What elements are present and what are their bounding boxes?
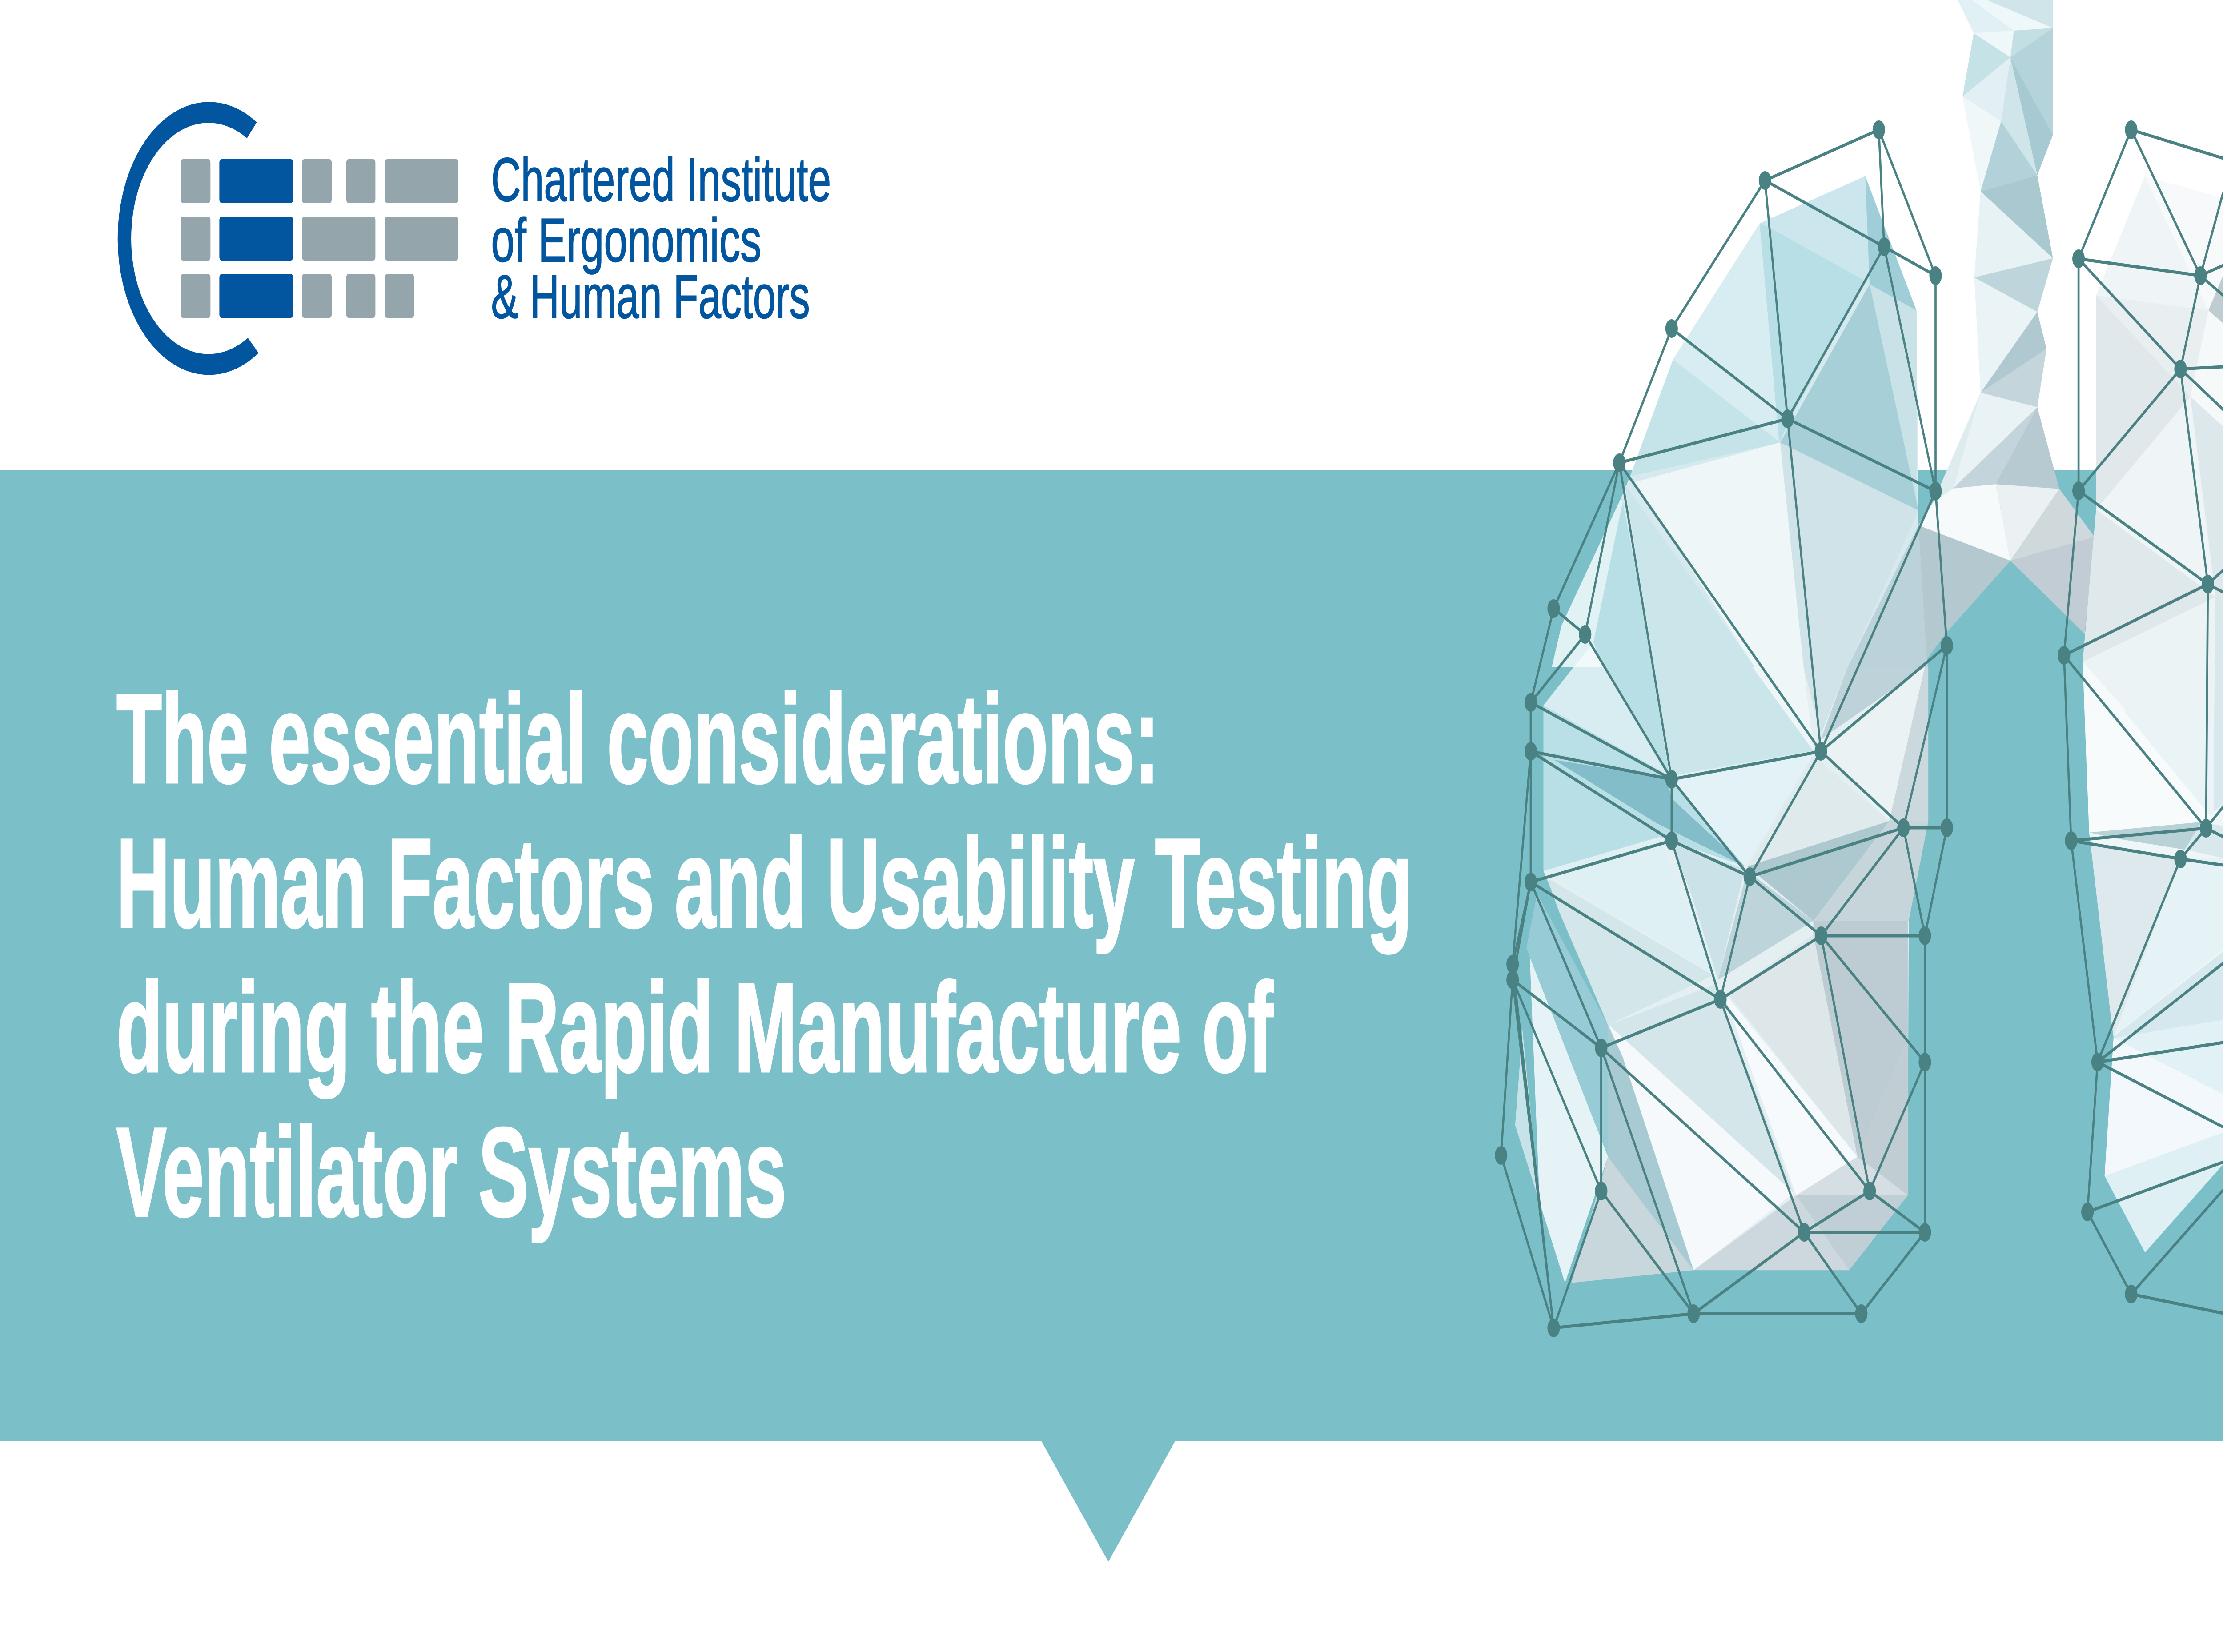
title: The essential considerations: xyxy=(116,669,1159,810)
right lung upper facets xyxy=(2083,176,2223,711)
teal banner with pointer xyxy=(0,470,2223,1562)
title xyxy=(116,669,1412,1243)
title: Ventilator Systems xyxy=(116,1102,786,1243)
logo wordmark: Chartered Institute xyxy=(491,145,831,215)
logo wordmark: & Human Factors xyxy=(491,262,810,332)
left lung upper facets xyxy=(1552,176,1928,667)
logo icon: C arc with bars xyxy=(118,102,458,375)
left lung wireframe mesh xyxy=(1495,120,1953,1337)
title: Human Factors and Usability Testing xyxy=(116,813,1412,954)
logo wordmark: of Ergonomics xyxy=(491,206,762,275)
right lung wireframe mesh xyxy=(2058,120,2223,1313)
illustration: low-poly lungs xyxy=(1495,0,2223,1337)
logo: Chartered Institute of Ergonomics & Human Factors xyxy=(118,102,831,375)
trachea and bronchi facets xyxy=(1918,0,2095,659)
title: during the Rapid Manufacture of xyxy=(116,958,1273,1099)
right lung lower facets xyxy=(2084,711,2223,1252)
left lung lower facets xyxy=(1515,667,1928,1283)
logo wordmark xyxy=(491,145,831,332)
